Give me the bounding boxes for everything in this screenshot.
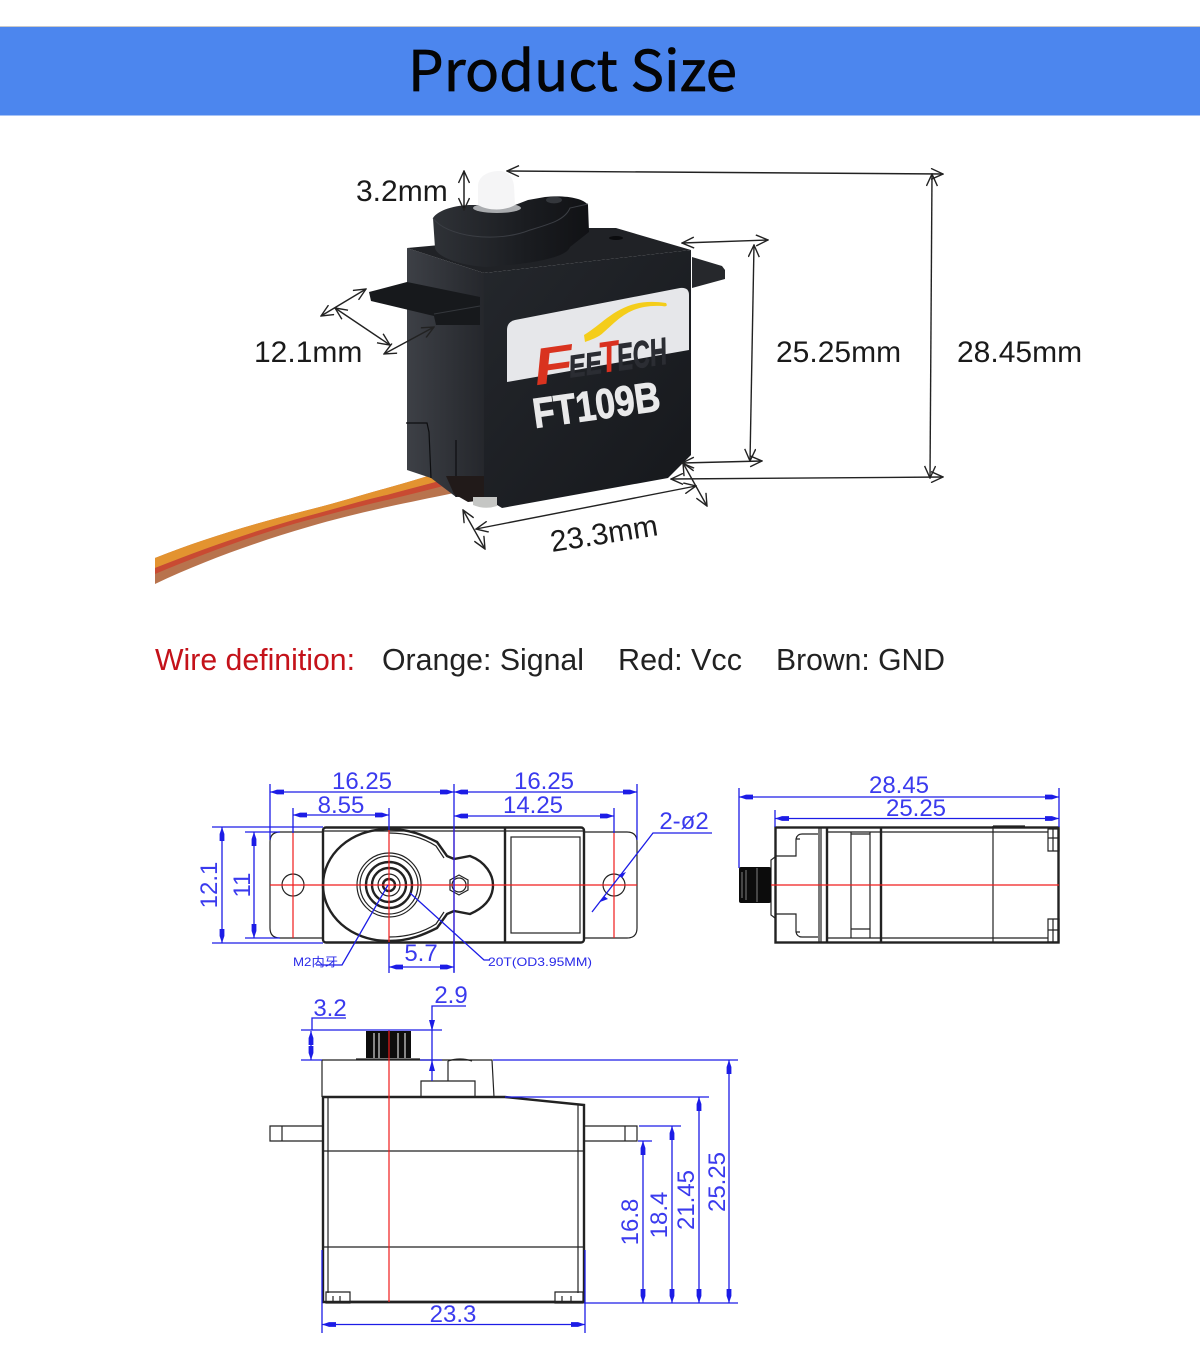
screw holes: [450, 875, 468, 895]
wire definition: Orange: Signal: [382, 642, 584, 677]
feet: [1048, 829, 1059, 942]
dim 12.1 and 11: 12.1: [196, 862, 223, 908]
wire definition: Brown: GND: [776, 642, 945, 677]
dim 8.55 and 14.25: 14.25: [503, 792, 563, 819]
photo dimension: 23.3mm: [463, 463, 707, 559]
photo dimension: 28.45mm: 28.45mm: [957, 336, 1082, 369]
case: [322, 1060, 494, 1097]
front face: [484, 250, 691, 508]
note: 20T spline: 20T(OD3.95MM): [488, 955, 592, 969]
photo dimension: 28.45mm: [507, 171, 1082, 479]
note: 20T spline: [410, 893, 592, 969]
flange outline: [270, 832, 637, 938]
product photo: servo: [155, 171, 725, 584]
height dimensions: 18.4: [646, 1192, 673, 1238]
case: [776, 828, 1058, 942]
logo: ECH: [614, 331, 670, 380]
dim 23.3: [322, 1250, 585, 1333]
title: Product Size: [408, 27, 737, 108]
height dimensions: [493, 1060, 738, 1303]
logo swoosh: [584, 302, 667, 342]
spline gear: [356, 1031, 420, 1059]
dim 3.2: 3.2: [313, 995, 347, 1022]
dim 25.25: 25.25: [886, 795, 946, 822]
photo dimension: 12.1mm: [254, 289, 434, 369]
dim 28.45: 28.45: [869, 772, 929, 799]
height dimensions: 25.25: [704, 1152, 731, 1212]
dim 23.3: 23.3: [430, 1301, 476, 1328]
dim 16.25 left: 16.25: [332, 768, 392, 795]
model text: FT109B: [530, 373, 663, 437]
side face: [407, 248, 484, 497]
wire exit: [446, 476, 484, 502]
height dimensions: 16.8: [617, 1199, 644, 1245]
wire definition: [155, 642, 945, 677]
photo dimension: 23.3mm: 23.3mm: [548, 509, 660, 559]
logo: EE: [566, 345, 605, 384]
height dimensions: 21.45: [673, 1170, 700, 1230]
drawing: top view: [196, 768, 712, 973]
case outline: [323, 828, 584, 942]
logo: T: [595, 331, 624, 383]
dim 12.1 and 11: [196, 827, 323, 943]
left mounting ear: [369, 282, 480, 325]
dim 8.55 and 14.25: [293, 792, 614, 833]
dim 2.9: 2.9: [434, 982, 468, 1009]
horn outline: [323, 829, 493, 941]
drawing: side view: [739, 772, 1059, 942]
output turret: [433, 196, 589, 267]
logo: F: [530, 334, 579, 397]
dim 5.7: [389, 940, 454, 973]
note: M2 thread: [293, 885, 388, 969]
wire definition: Wire definition:: [155, 642, 355, 677]
note: M2 thread: M2内牙: [293, 955, 338, 969]
note: 2-ø2: [592, 808, 712, 912]
dim 3.2: [301, 995, 442, 1060]
dim 12.1 and 11: 11: [229, 873, 256, 897]
logo: [530, 321, 671, 397]
white shaft: [473, 203, 521, 213]
drawing: front view: [270, 982, 738, 1333]
note: 2-ø2: 2-ø2: [659, 808, 709, 835]
dim 2.9: [420, 982, 468, 1081]
photo dimension: 3.2mm: 3.2mm: [356, 175, 448, 208]
spline gear: [739, 867, 771, 903]
header banner: [0, 26, 1200, 116]
centre lines: [270, 828, 637, 942]
wire definition: Red: Vcc: [618, 642, 742, 677]
servo horn block: [421, 1059, 475, 1097]
back deck: [407, 228, 691, 273]
screws: [473, 497, 497, 508]
spline circles: [357, 853, 421, 917]
ears: [270, 1126, 637, 1141]
dim 28.45: [739, 772, 1059, 868]
wire bundle: [155, 473, 454, 584]
dim 5.7: 5.7: [404, 940, 438, 967]
side connector detail: [406, 423, 456, 497]
right mounting ear: [692, 257, 725, 288]
photo dimension: 25.25mm: 25.25mm: [776, 336, 901, 369]
dim 16.25 left: 16.25: [514, 768, 574, 795]
photo dimension: 25.25mm: [682, 240, 901, 463]
feet: [326, 1292, 583, 1303]
motor bosses: [775, 834, 818, 937]
label panel: [507, 288, 689, 397]
photo dimension: 12.1mm: 12.1mm: [254, 336, 362, 369]
dim 16.25 left: [270, 768, 637, 972]
dim 8.55 and 14.25: 8.55: [318, 792, 364, 819]
